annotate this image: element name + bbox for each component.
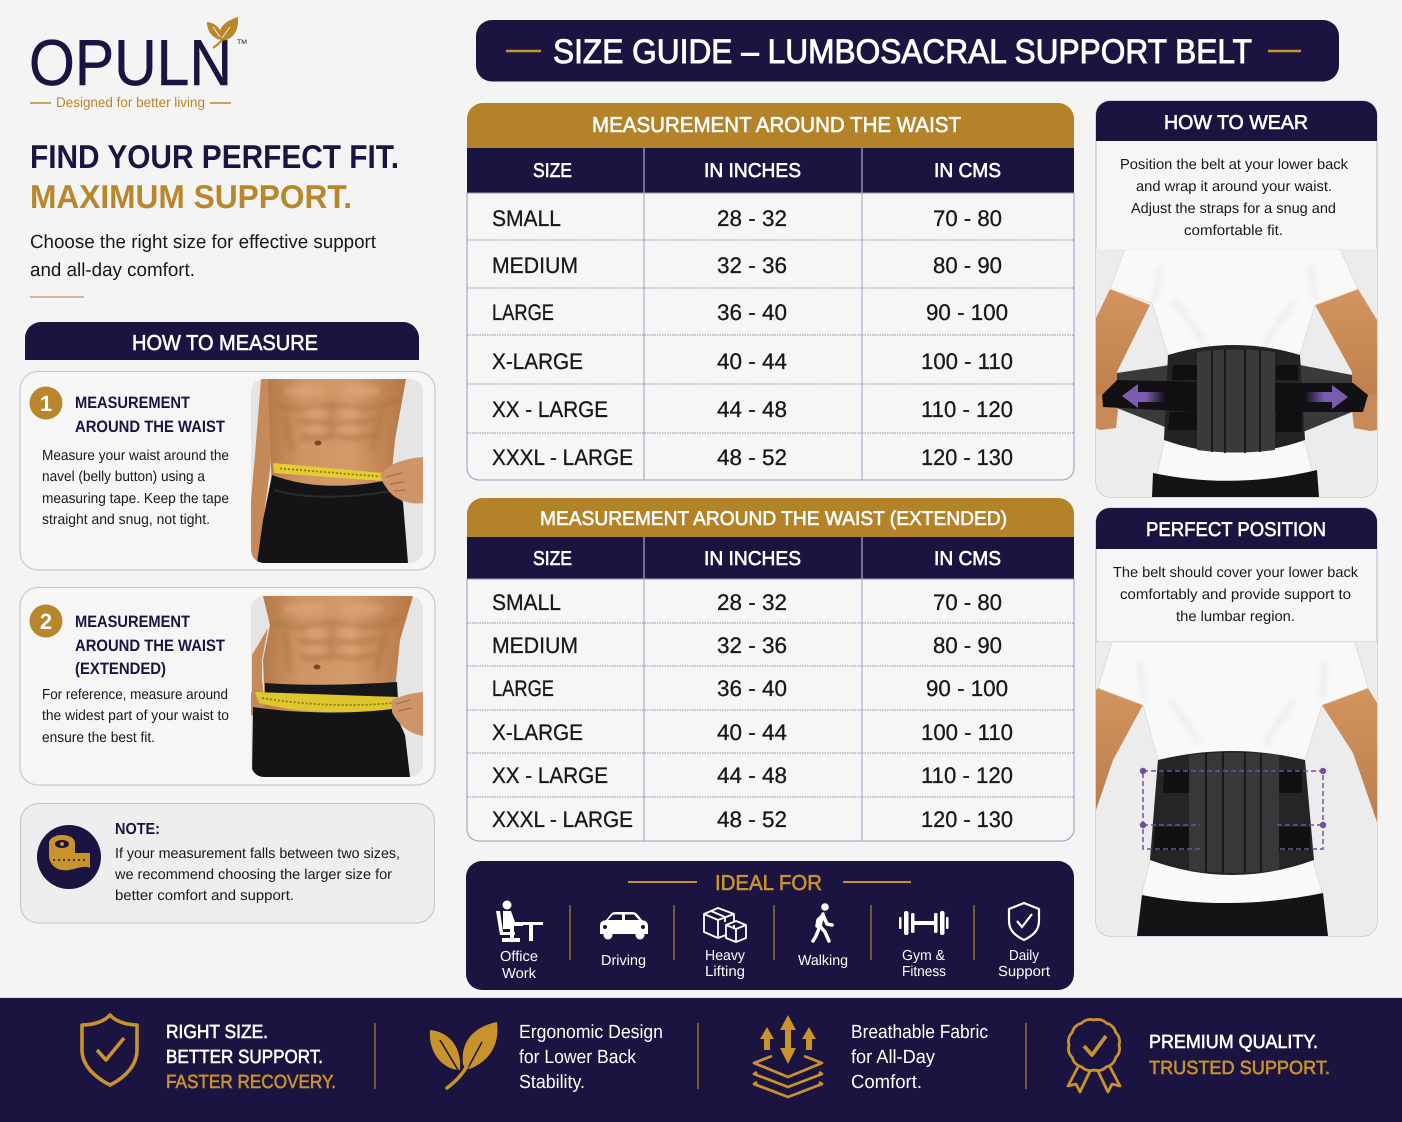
- row xxxl-large: XXXL - LARGE: [492, 445, 633, 470]
- row small: [492, 590, 1002, 615]
- headline: [30, 138, 399, 215]
- footer text: ergonomic: [519, 1022, 663, 1093]
- row small: 28 - 32: [717, 590, 787, 615]
- perfect position text: [1113, 565, 1359, 625]
- row medium: 32 - 36: [717, 633, 787, 658]
- icon: daily support: Daily: [1009, 948, 1040, 964]
- row xx-large: 44 - 48: [717, 763, 787, 788]
- footer text: right size: [166, 1022, 336, 1093]
- icon: measuring tape: [37, 825, 101, 889]
- step 1 text: [42, 448, 229, 528]
- table 1 title bar: [467, 103, 1074, 148]
- icon: award medal: [1068, 1019, 1120, 1092]
- panel: how to wear: [1096, 101, 1377, 497]
- headline: MAXIMUM SUPPORT.: [30, 178, 352, 215]
- row small: SMALL: [492, 206, 561, 231]
- row large: [492, 676, 1008, 701]
- photo: belt position: [1096, 642, 1377, 936]
- logo: Designed for better living: [56, 94, 205, 110]
- how to wear heading: [1096, 101, 1377, 141]
- perfect position text: the lumbar region.: [1176, 609, 1295, 625]
- footer text: right size: BETTER SUPPORT.: [166, 1047, 323, 1068]
- row medium: 80 - 90: [933, 633, 1002, 658]
- row xx-large: XX - LARGE: [492, 763, 608, 788]
- table: measurement around the waist extended: [467, 498, 1074, 841]
- step 2 text: ensure the best fit.: [42, 730, 155, 746]
- table 1 column headers: SIZE: [533, 160, 572, 182]
- row large: 36 - 40: [717, 676, 787, 701]
- title banner: [476, 20, 1339, 82]
- step 2 text: [42, 687, 229, 746]
- step 2 title: [75, 613, 225, 678]
- footer text: premium quality: [1149, 1032, 1330, 1079]
- icon: walking: [798, 903, 848, 969]
- center panel: [1189, 752, 1279, 873]
- note text: If your measurement falls between two sizes,: [115, 846, 400, 862]
- row x-large: X-LARGE: [492, 349, 583, 374]
- logo: OPULN: [29, 26, 232, 99]
- row large: 90 - 100: [926, 300, 1008, 325]
- note text: [114, 821, 400, 904]
- footer text: breathable: [851, 1022, 988, 1093]
- icon: driving: Driving: [601, 953, 646, 969]
- intro text: [30, 232, 377, 281]
- footer band: [0, 997, 1402, 1122]
- how to wear text: and wrap it around your waist.: [1136, 179, 1332, 195]
- perfect position heading: PERFECT POSITION: [1146, 519, 1326, 541]
- footer text: breathable: Comfort.: [851, 1072, 922, 1093]
- step badge 1: 1: [40, 391, 52, 416]
- step 1 text: straight and snug, not tight.: [42, 512, 210, 528]
- row xx-large: [492, 397, 1013, 422]
- how to wear heading: HOW TO WEAR: [1164, 112, 1308, 134]
- table 2 body: [467, 579, 1074, 841]
- note text: NOTE:: [115, 821, 160, 838]
- row x-large: [492, 349, 1013, 374]
- row large: LARGE: [492, 300, 554, 325]
- row xxxl-large: [492, 445, 1013, 470]
- step 1 text: Measure your waist around the: [42, 448, 229, 464]
- how to wear text: Position the belt at your lower back: [1120, 157, 1349, 173]
- row xx-large: 44 - 48: [717, 397, 787, 422]
- note text: we recommend choosing the larger size for: [114, 867, 392, 883]
- footer text: premium quality: PREMIUM QUALITY.: [1149, 1032, 1318, 1053]
- panel: measurement 1: [20, 372, 435, 570]
- ideal for heading: IDEAL FOR: [715, 871, 822, 895]
- step 1 title: MEASUREMENT: [75, 394, 190, 412]
- row xxxl-large: 48 - 52: [717, 445, 787, 470]
- row medium: [492, 633, 1002, 658]
- step 1 text: measuring tape. Keep the tape: [42, 491, 229, 507]
- how to wear text: [1120, 157, 1349, 239]
- step 2 text: the widest part of your waist to: [42, 708, 229, 724]
- row xxxl-large: 120 - 130: [921, 445, 1013, 470]
- footer text: ergonomic: Stability.: [519, 1072, 585, 1093]
- row small: SMALL: [492, 590, 561, 615]
- row xxxl-large: 48 - 52: [717, 807, 787, 832]
- belt body: [1164, 345, 1305, 452]
- shirt: [1098, 642, 1368, 907]
- panel: measurement 2: [20, 588, 435, 785]
- table 1 column headers: IN INCHES: [704, 160, 801, 182]
- table 2 title bar: [467, 498, 1074, 537]
- icon: daily support: [998, 903, 1050, 980]
- arms: [1096, 289, 1150, 395]
- table 1 column headers: [467, 148, 1074, 193]
- step 1 title: AROUND THE WAIST: [75, 418, 225, 436]
- row small: 28 - 32: [717, 206, 787, 231]
- how to measure heading: HOW TO MEASURE: [132, 331, 318, 355]
- panel: note: [20, 804, 434, 923]
- footer text: ergonomic: for Lower Back: [519, 1047, 636, 1068]
- pants: [1137, 893, 1328, 936]
- panel: ideal for: [466, 861, 1074, 990]
- table 2 column headers: IN INCHES: [704, 548, 801, 570]
- table 2 column headers: [467, 537, 1074, 579]
- row medium: [492, 253, 1002, 278]
- panel: perfect position: [1096, 508, 1377, 936]
- straps: [1102, 380, 1197, 412]
- step badge 1: [30, 386, 62, 420]
- row xx-large: [492, 763, 1013, 788]
- note text: better comfort and support.: [115, 888, 294, 904]
- step 2 text: For reference, measure around: [42, 687, 228, 703]
- title banner: SIZE GUIDE – LUMBOSACRAL SUPPORT BELT: [553, 33, 1252, 71]
- table 1 title bar: MEASUREMENT AROUND THE WAIST: [592, 113, 961, 137]
- step badge 2: 2: [40, 609, 52, 634]
- icon: shield check: [82, 1015, 137, 1085]
- icon: breathable layers: [754, 1015, 822, 1097]
- footer text: breathable: Breathable Fabric: [851, 1022, 988, 1043]
- footer text: ergonomic: Ergonomic Design: [519, 1022, 663, 1043]
- shirt: [1110, 249, 1358, 482]
- icon: gym and fitness: Fitness: [902, 964, 946, 980]
- belt body: [1150, 751, 1314, 875]
- footer text: right size: FASTER RECOVERY.: [166, 1072, 336, 1093]
- icon: gym and fitness: [899, 911, 948, 980]
- row xxxl-large: XXXL - LARGE: [492, 807, 633, 832]
- position guides: [1143, 771, 1323, 849]
- table 2 column headers: IN CMS: [934, 548, 1001, 570]
- table 2 title bar: MEASUREMENT AROUND THE WAIST (EXTENDED): [540, 508, 1007, 530]
- row medium: MEDIUM: [492, 633, 578, 658]
- intro text: Choose the right size for effective support: [30, 232, 377, 253]
- perfect position text: The belt should cover your lower back: [1113, 565, 1359, 581]
- icon: office work: Office: [500, 949, 538, 965]
- perfect position heading: [1096, 508, 1377, 549]
- headline: FIND YOUR PERFECT FIT.: [30, 138, 399, 175]
- step 2 title: (EXTENDED): [75, 660, 166, 678]
- icon: leaves: [430, 1022, 498, 1088]
- icon: gym and fitness: Gym &: [902, 948, 945, 964]
- row medium: 32 - 36: [717, 253, 787, 278]
- row xx-large: XX - LARGE: [492, 397, 608, 422]
- row xx-large: 110 - 120: [921, 397, 1013, 422]
- icon: heavy lifting: Heavy: [705, 948, 746, 964]
- footer text: breathable: for All-Day: [851, 1047, 935, 1068]
- row small: [492, 206, 1002, 231]
- step 1 text: navel (belly button) using a: [42, 469, 206, 485]
- how to measure heading: [25, 322, 419, 360]
- row xxxl-large: 120 - 130: [921, 807, 1013, 832]
- photo: waist measurement: [251, 379, 423, 563]
- row large: 90 - 100: [926, 676, 1008, 701]
- logo: TM: [237, 39, 247, 46]
- icon: heavy lifting: [704, 908, 746, 980]
- row medium: 80 - 90: [933, 253, 1002, 278]
- row x-large: 40 - 44: [717, 720, 787, 745]
- row xxxl-large: [492, 807, 1013, 832]
- icon: heavy lifting: Lifting: [705, 964, 745, 980]
- footer text: right size: RIGHT SIZE.: [166, 1022, 268, 1043]
- photo: extended waist measurement: [251, 596, 423, 777]
- table 1 column headers: IN CMS: [934, 160, 1001, 182]
- step 1 title: [75, 394, 225, 436]
- icon: driving: [600, 912, 648, 969]
- icon: office work: Work: [502, 966, 537, 982]
- step 2 title: MEASUREMENT: [75, 613, 190, 631]
- step 2 title: AROUND THE WAIST: [75, 637, 225, 655]
- arms: [1096, 688, 1143, 810]
- row large: LARGE: [492, 676, 554, 701]
- row x-large: 40 - 44: [717, 349, 787, 374]
- icon: daily support: Support: [998, 964, 1050, 980]
- row x-large: 100 - 110: [921, 720, 1013, 745]
- row large: [492, 300, 1008, 325]
- row xx-large: 110 - 120: [921, 763, 1013, 788]
- icon: walking: Walking: [798, 953, 848, 969]
- side wings: [1117, 365, 1170, 427]
- row large: 36 - 40: [717, 300, 787, 325]
- row medium: MEDIUM: [492, 253, 578, 278]
- table 1 body: [467, 193, 1074, 480]
- table: measurement around the waist: [467, 103, 1074, 480]
- row x-large: X-LARGE: [492, 720, 583, 745]
- footer text: premium quality: TRUSTED SUPPORT.: [1149, 1058, 1330, 1079]
- center panel: [1197, 350, 1275, 452]
- icon: office work: [496, 900, 543, 982]
- row small: 70 - 80: [933, 590, 1002, 615]
- row small: 70 - 80: [933, 206, 1002, 231]
- row x-large: [492, 720, 1013, 745]
- arrows: [1122, 384, 1165, 408]
- photo: wearing the belt: [1096, 249, 1377, 497]
- row x-large: 100 - 110: [921, 349, 1013, 374]
- how to wear text: comfortable fit.: [1184, 223, 1283, 239]
- step badge 2: [30, 604, 62, 638]
- how to wear text: Adjust the straps for a snug and: [1131, 201, 1336, 217]
- table 2 column headers: SIZE: [533, 548, 572, 570]
- perfect position text: comfortably and provide support to: [1120, 587, 1351, 603]
- intro text: and all-day comfort.: [30, 260, 195, 281]
